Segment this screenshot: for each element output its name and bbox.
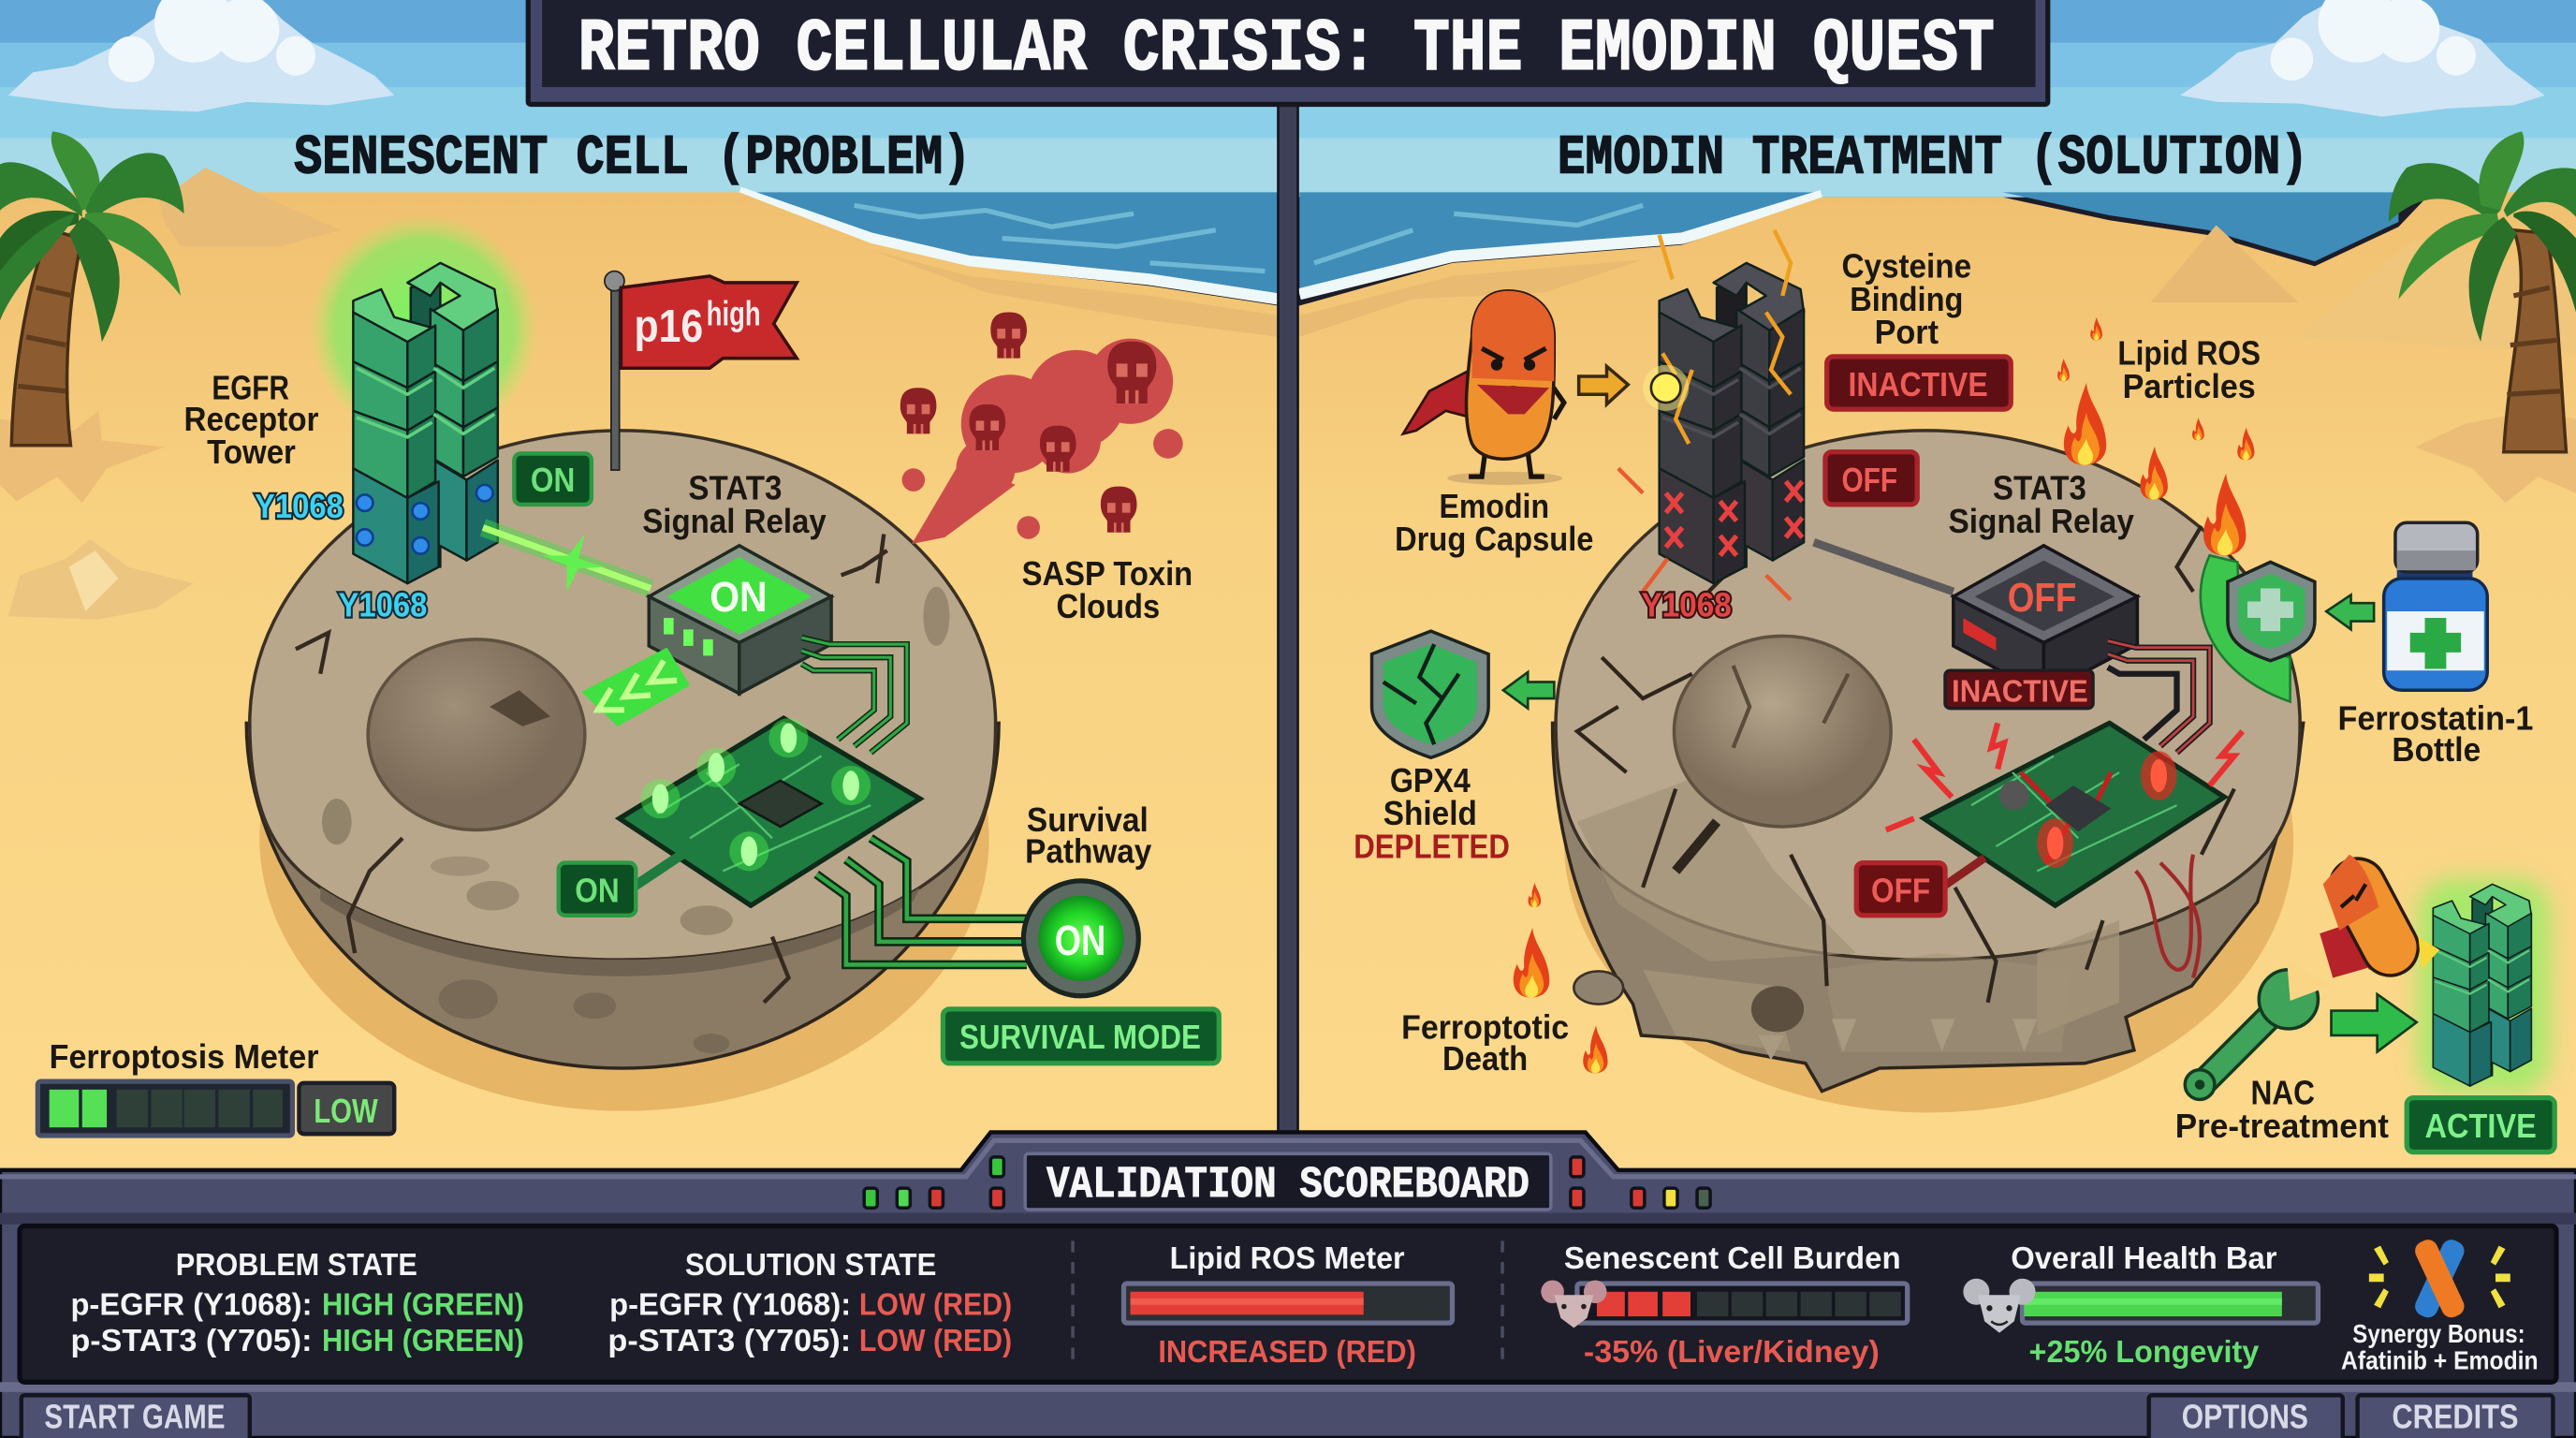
phospho dots (357, 485, 493, 554)
palm right (2389, 131, 2576, 452)
ferroptosis meter bar (37, 1081, 394, 1136)
membrane patch (2201, 555, 2291, 702)
label: NAC Pre-treatment: NAC (2250, 1074, 2315, 1112)
ferroptosis meter bar: LOW (314, 1092, 378, 1130)
broken red wires (2136, 855, 2200, 977)
circuit board damaged (1924, 723, 2224, 905)
nucleus damaged (1674, 636, 1891, 827)
badge: ON tower (514, 453, 592, 505)
synergy bonus: Synergy Bonus: (2352, 1319, 2525, 1348)
center divider (1278, 98, 1298, 1142)
lipid ROS meter: INCREASED (RED) (1158, 1335, 1416, 1370)
ferroptotic flames and rock (1514, 883, 1623, 1073)
label: Survival Pathway: Survival (1027, 800, 1149, 839)
relay box ON: ON (710, 573, 768, 621)
LEDs (640, 718, 871, 871)
heading: senescent cell: SENESCENT CELL (PROBLEM) (294, 125, 971, 189)
arrow: emodin to tower (1579, 366, 1628, 404)
heading: emodin treatment: EMODIN TREATMENT (SOLUTION) (1558, 125, 2308, 189)
badge: INACTIVE port (1827, 357, 2011, 409)
label: Ferroptotic Death (1401, 1007, 1569, 1078)
label: Emodin Drug Capsule: Emodin (1439, 487, 1549, 525)
problem state: p-EGFR (Y1068): (70, 1287, 312, 1322)
label: GPX4 Shield Depleted: Shield (1383, 794, 1477, 832)
relay box OFF: OFF (2008, 575, 2076, 621)
arrow: NAC (2331, 994, 2417, 1051)
label: STAT3 Signal Relay right: STAT3 (1993, 469, 2086, 507)
label: GPX4 Shield Depleted: DEPLETED (1354, 827, 1510, 865)
button: start game: START GAME (44, 1397, 225, 1435)
binding spark (1643, 365, 1689, 411)
EGFR tower inactive (1618, 230, 1804, 600)
status LEDs left (864, 1157, 1003, 1208)
label: Emodin Drug Capsule (1395, 487, 1593, 558)
badge: INACTIVE relay: INACTIVE (1952, 675, 2088, 710)
title banner (526, 0, 2050, 107)
relay box ON (649, 546, 831, 694)
problem state: HIGH (GREEN) (322, 1287, 524, 1322)
label: GPX4 Shield Depleted (1354, 761, 1510, 865)
SASP toxin clouds (900, 313, 1183, 544)
label: NAC Pre-treatment (2175, 1074, 2389, 1145)
label: Cysteine Binding Port (1841, 247, 1971, 351)
glow around EGFR (309, 213, 539, 444)
label: EGFR Receptor Tower (184, 369, 318, 471)
console frame (0, 1132, 2576, 1438)
label: Cysteine Binding Port: Binding (1850, 280, 1963, 318)
label: Ferroptosis Meter: Ferroptosis Meter (50, 1037, 318, 1076)
label: EGFR Receptor Tower: Tower (207, 433, 296, 471)
ocean left (739, 192, 1278, 299)
capsule bullet (2320, 849, 2439, 985)
emodin capsule hero (1403, 291, 1564, 485)
flag: p16 high: p16 (634, 301, 703, 352)
label: SASP Toxin Clouds (1022, 554, 1193, 625)
survival pathway button (1023, 881, 1138, 996)
overall health bar (1963, 1241, 2318, 1370)
synergy bonus (2341, 1237, 2539, 1374)
readout screen (20, 1226, 2556, 1382)
badge: ACTIVE: ACTIVE (2425, 1107, 2537, 1145)
solution state (607, 1248, 1012, 1358)
lipid ROS flames (2057, 317, 2254, 555)
label: GPX4 Shield Depleted: GPX4 (1390, 761, 1471, 800)
badge: ON tower: ON (531, 461, 575, 499)
badge: OFF board: OFF (1871, 872, 1930, 910)
button: options: OPTIONS (2182, 1397, 2308, 1435)
sand mound (8, 539, 194, 620)
badge: OFF tower (1825, 452, 1917, 505)
flag: p16 high: high (707, 295, 761, 333)
label: Survival Pathway: Pathway (1025, 832, 1151, 871)
NAC glow (2419, 879, 2550, 1093)
label: Lipid ROS Particles (2117, 334, 2261, 405)
status LEDs right (1571, 1157, 1710, 1208)
cell body damaged (1553, 431, 2304, 1112)
problem state: p-STAT3 (Y705): (70, 1324, 312, 1358)
GPX4 shield cracked (1372, 631, 1488, 757)
label: Ferrostatin-1 Bottle: Ferrostatin-1 (2338, 698, 2533, 737)
badge: OFF tower: OFF (1841, 461, 1897, 499)
relay box OFF (1954, 546, 2137, 694)
lipid ROS meter (1123, 1241, 1453, 1370)
badge: SURVIVAL MODE: SURVIVAL MODE (959, 1018, 1201, 1056)
dead signal line (1814, 542, 1954, 592)
label: SASP Toxin Clouds: Clouds (1057, 587, 1160, 625)
label: EGFR Receptor Tower: EGFR (212, 369, 289, 407)
nucleus (368, 639, 585, 829)
wires relay to board damaged (2108, 641, 2210, 753)
label: EGFR Receptor Tower: Receptor (184, 400, 318, 438)
sky background (0, 0, 2576, 198)
circuit board (620, 718, 920, 905)
shield: ferrostatin (2228, 562, 2315, 661)
label: Lipid ROS Particles: Lipid ROS (2117, 334, 2261, 373)
badge: ACTIVE (2407, 1098, 2554, 1152)
senescent cell burden (1541, 1241, 1908, 1370)
button: credits (2358, 1395, 2553, 1438)
palm shadow left (0, 411, 165, 503)
panel: senescent cell (problem) (37, 125, 1219, 1136)
label: STAT3 Signal Relay right: Signal Relay (1949, 502, 2134, 540)
flag: p16 high (605, 271, 797, 470)
button: credits: CREDITS (2392, 1397, 2519, 1435)
label: Ferrostatin-1 Bottle (2338, 698, 2533, 769)
lipid ROS meter: Lipid ROS Meter (1170, 1241, 1405, 1276)
survival pathway button: ON (1055, 917, 1105, 964)
sad mouse icon (1541, 1280, 1606, 1328)
solution state: LOW (RED) (859, 1287, 1012, 1322)
solution state: p-STAT3 (Y705): (607, 1324, 851, 1358)
label: Ferroptotic Death: Ferroptotic (1401, 1007, 1569, 1046)
title text: RETRO CELLULAR CRISIS: THE EMODIN QUEST (578, 7, 1995, 92)
solution state: p-EGFR (Y1068): (609, 1287, 851, 1322)
wires board to survival (816, 838, 1027, 964)
label: Y1068 red: Y1068 (1641, 585, 1732, 624)
palm left (0, 131, 184, 446)
cape (1403, 366, 1477, 433)
happy mouse icon (1963, 1279, 2036, 1333)
cloud left (8, 0, 394, 111)
overall health bar: Overall Health Bar (2011, 1241, 2277, 1276)
badge: OFF board (1856, 858, 1984, 916)
label: Ferrostatin-1 Bottle: Bottle (2392, 730, 2481, 769)
cell body (246, 431, 999, 1111)
senescent cell burden: -35% (Liver/Kidney) (1584, 1335, 1880, 1370)
label: Y1068 lower: Y1068 (339, 585, 427, 624)
wires relay to board (801, 638, 907, 753)
badge: ON board (559, 851, 687, 916)
ocean right (1299, 192, 2398, 294)
label: Cysteine Binding Port: Port (1875, 313, 1939, 351)
red X ports (1666, 481, 1802, 555)
label: Emodin Drug Capsule: Drug Capsule (1395, 520, 1593, 558)
label: STAT3 Signal Relay right (1949, 469, 2134, 540)
panel: emodin treatment (solution) (1354, 125, 2554, 1152)
sand beach (0, 168, 2576, 1183)
label: Cysteine Binding Port: Cysteine (1841, 247, 1971, 286)
palm shadow right (2415, 411, 2576, 503)
ferrostatin bottle (2384, 522, 2487, 690)
lightning cracks (1660, 230, 1791, 444)
arrow: GPX4 (1503, 672, 1554, 709)
label: STAT3 Signal Relay (642, 469, 827, 540)
badge: INACTIVE port: INACTIVE (1848, 365, 1988, 404)
EGFR receptor tower (353, 263, 498, 583)
problem state: HIGH (GREEN) (322, 1324, 524, 1358)
label: STAT3 Signal Relay: Signal Relay (642, 502, 827, 540)
problem state (70, 1248, 524, 1358)
cloud right (2180, 0, 2545, 117)
console title: VALIDATION SCOREBOARD (1046, 1161, 1530, 1211)
label: Lipid ROS Particles: Particles (2123, 367, 2256, 405)
red LEDs (2037, 751, 2177, 868)
label: Y1068 upper: Y1068 (255, 487, 344, 525)
solution state: LOW (RED) (859, 1324, 1012, 1358)
overall health bar: +25% Longevity (2029, 1335, 2260, 1370)
red sparks (1886, 723, 2243, 829)
label: NAC Pre-treatment: Pre-treatment (2175, 1107, 2389, 1145)
small EGFR tower active (2433, 884, 2531, 1086)
solution state: SOLUTION STATE (685, 1248, 936, 1283)
label: Survival Pathway (1025, 800, 1151, 871)
label: Ferroptotic Death: Death (1442, 1039, 1528, 1078)
problem state: PROBLEM STATE (176, 1248, 417, 1283)
label: SASP Toxin Clouds: SASP Toxin (1022, 554, 1193, 593)
senescent cell burden: Senescent Cell Burden (1564, 1241, 1901, 1276)
badge: ON board: ON (575, 872, 620, 910)
chevron arrow (581, 648, 690, 726)
wrench (2185, 960, 2330, 1099)
wires relay to board colour (801, 638, 907, 753)
label: STAT3 Signal Relay: STAT3 (688, 469, 782, 507)
panel: validation scoreboard (0, 1132, 2576, 1438)
arrow: ferrostatin to shield (2326, 594, 2374, 629)
synergy bonus: Afatinib + Emodin (2341, 1345, 2539, 1374)
badge: SURVIVAL MODE (943, 1009, 1219, 1064)
signal beam (483, 527, 651, 592)
